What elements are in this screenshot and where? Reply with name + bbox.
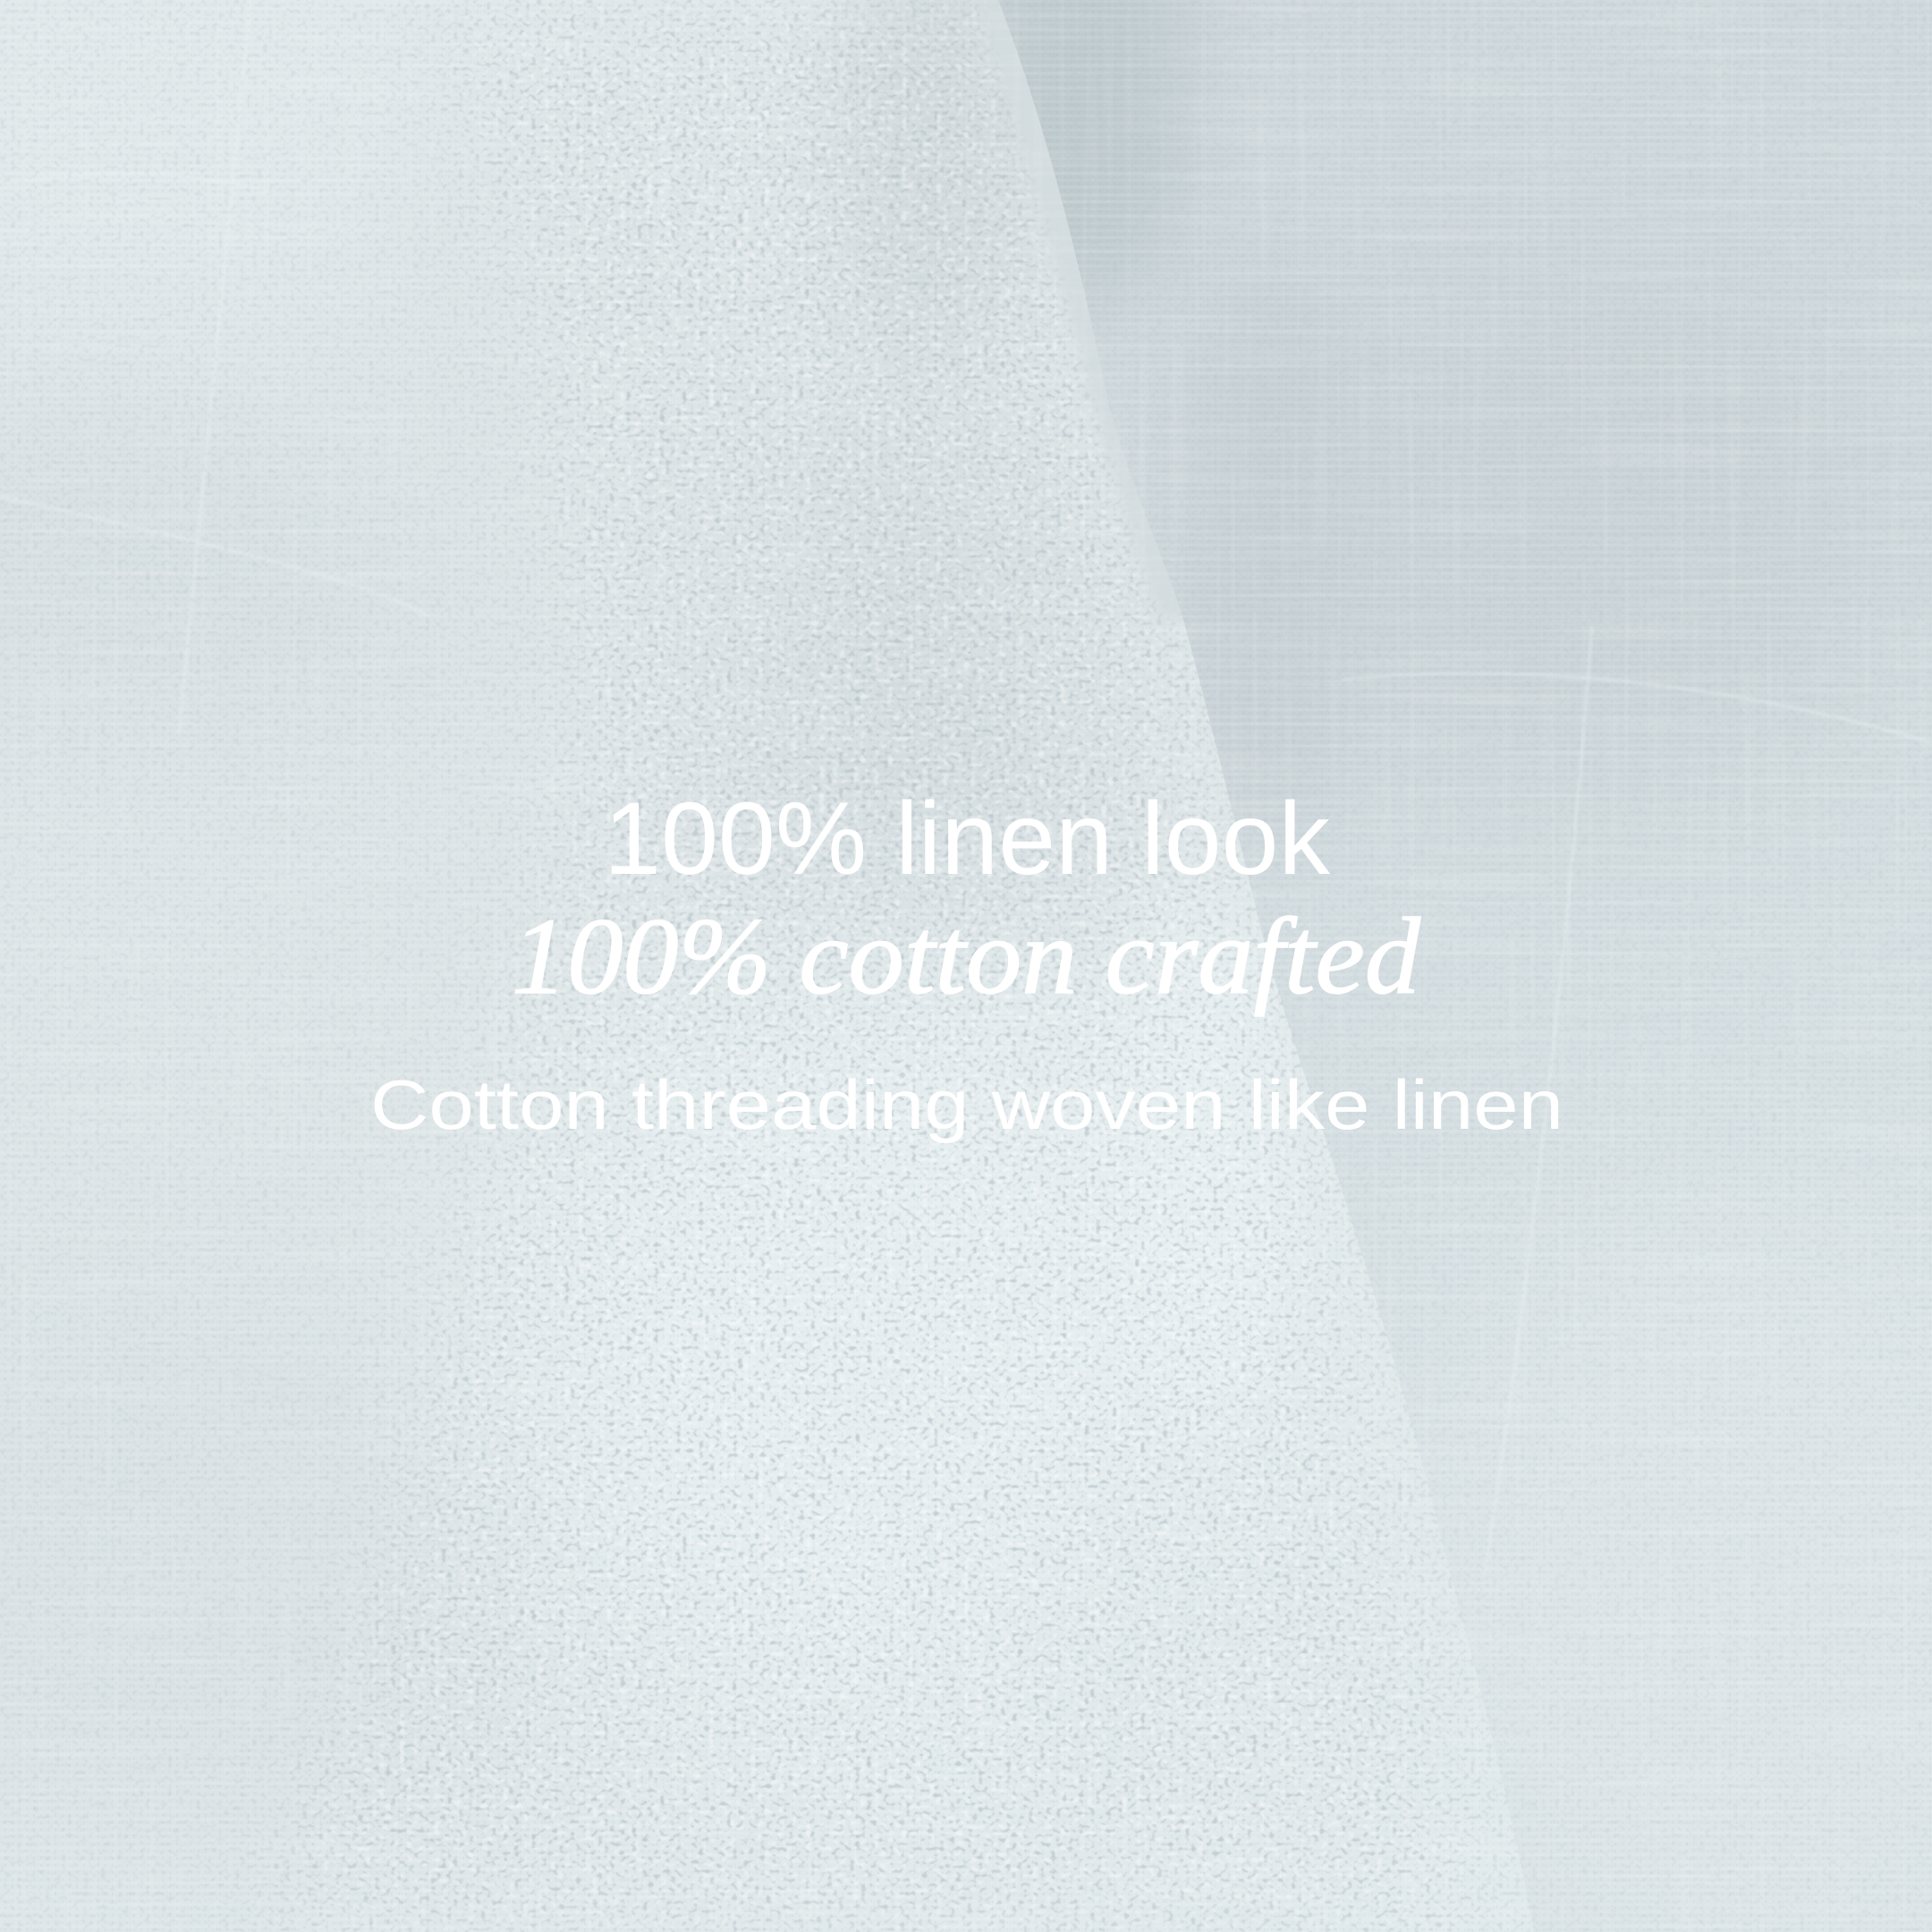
subheading: Cotton threading woven like linen: Cotton threading woven like linen	[370, 1065, 1563, 1144]
heading: 100% cotton crafted: 100% cotton crafted	[512, 896, 1421, 1017]
main foreground fold	[0, 0, 1499, 1932]
heading: 100% linen look: 100% linen look	[604, 782, 1330, 896]
